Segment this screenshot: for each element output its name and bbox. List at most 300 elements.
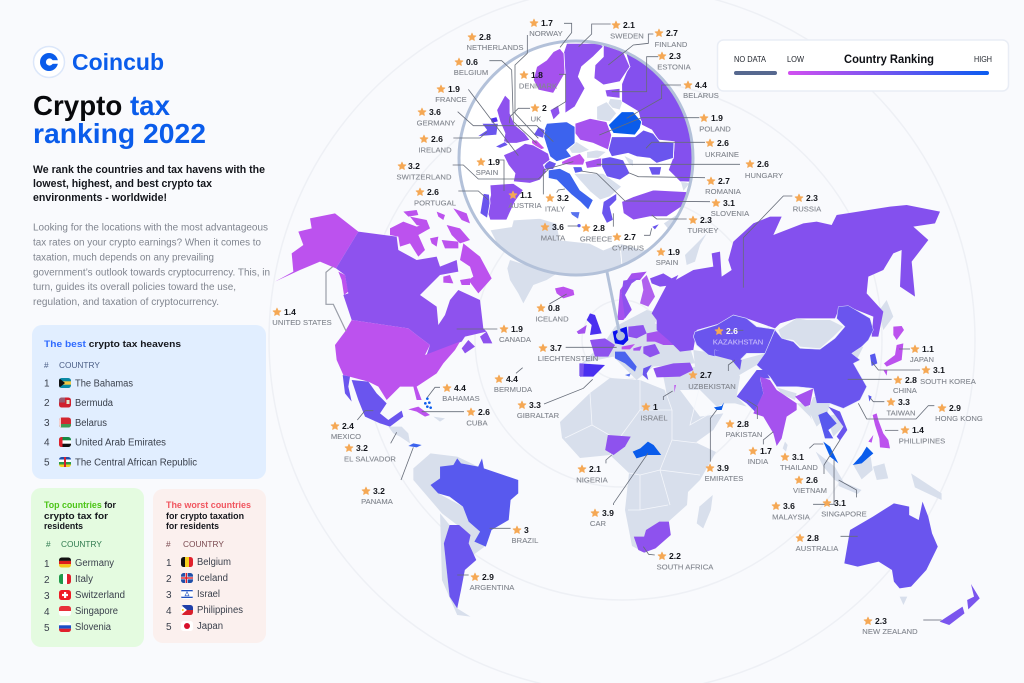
country: Panama: [408, 443, 422, 447]
country: United States: [335, 320, 460, 400]
label: Belgium: [454, 57, 537, 143]
row: Germany: 1: [44, 559, 50, 570]
label: Greece: GREECE: [580, 234, 612, 244]
row: Belarus: [44, 418, 107, 428]
country: South Africa: [634, 522, 671, 553]
country: Canada arctic islands: [390, 208, 492, 293]
flag: Japan: [181, 621, 193, 631]
row: The Bahamas: 1: [44, 378, 50, 390]
logo: Coincub: [34, 46, 164, 78]
label: Gibraltar: GIBRALTAR: [517, 411, 560, 420]
label: Germany: GERMANY: [417, 118, 455, 128]
label: Japan: [899, 344, 934, 364]
subtitle: We rank the countries and tax havens with the: [33, 164, 265, 176]
label: United States: [272, 267, 346, 331]
label: Romania: 2.7: [718, 176, 730, 186]
label: Bahamas: [427, 383, 480, 403]
row: Israel: 3: [166, 590, 172, 601]
label: Emirates: 3.9: [717, 463, 729, 473]
legend: country ranking: [718, 40, 1008, 91]
table header: COUNTRY: [61, 539, 102, 549]
row: Switzerland: 3: [44, 591, 50, 602]
label: Kazakhstan: [713, 326, 763, 346]
label: South Africa: [643, 547, 714, 572]
label: Israel: 1: [653, 402, 658, 412]
label: Estonia: [612, 51, 692, 92]
country: India: [753, 377, 797, 446]
label: India: 1.7: [760, 446, 772, 456]
logo: Coincub: Coincub: [72, 49, 164, 75]
label: Bahamas: 4.4: [454, 383, 466, 393]
label: India: INDIA: [748, 457, 769, 466]
magnifier handle: [607, 272, 625, 340]
country: Newfoundland: [480, 332, 492, 343]
country: Taiwan: [868, 395, 872, 402]
intro paragraph: [33, 222, 270, 308]
country: Malaysia peninsula: [823, 442, 838, 463]
label: Spain (second): [656, 247, 680, 267]
flag: Bermuda: [59, 398, 71, 408]
label: Estonia: ESTONIA: [657, 62, 692, 72]
label: Norway: [529, 18, 572, 47]
label: Panama: PANAMA: [361, 497, 394, 506]
country: China: [757, 306, 873, 408]
label: Taiwan: TAIWAN: [887, 408, 915, 418]
title: Crypto tax: [33, 90, 170, 121]
intro paragraph: regulation, and taxation of cryptocurrency.: [33, 297, 219, 308]
flag: Switzerland: [59, 590, 71, 600]
label: Australia: [796, 533, 858, 553]
row: The Bahamas: The Bahamas: [75, 378, 133, 390]
label: Denmark: [519, 70, 566, 109]
label: Kazakhstan: KAZAKHSTAN: [713, 338, 763, 346]
flag: Slovenia: [59, 622, 71, 632]
label: Poland: [599, 113, 731, 135]
label: Hungary: [597, 159, 783, 180]
label: Uzbekistan: UZBEKISTAN: [688, 382, 736, 391]
Europe countries: [478, 44, 692, 230]
label: Malaysia: MALAYSIA: [772, 512, 811, 522]
heading: top countries: Top countries for: [44, 500, 116, 511]
flag: UAE: [59, 437, 71, 447]
country: Pakistan: [737, 370, 770, 412]
label: Switzerland: [397, 161, 548, 182]
row: Belarus: 3: [44, 418, 50, 429]
label: Brazil: BRAZIL: [512, 536, 538, 545]
label: Singapore: SINGAPORE: [821, 510, 867, 518]
country: Mexico: [352, 380, 403, 427]
label: Bahamas: BAHAMAS: [442, 394, 480, 403]
flag: Belgium: [181, 557, 193, 567]
row: Philippines: 4: [166, 606, 172, 617]
flag: Philippines: [181, 605, 193, 615]
label: Emirates: EMIRATES: [705, 474, 743, 483]
label: UK: [509, 103, 547, 124]
label: Japan: JAPAN: [910, 355, 934, 364]
label: Greece: [580, 213, 613, 244]
label: Norway: 1.7: [541, 18, 553, 28]
table header: #: [166, 539, 171, 549]
label: CAR: CAR: [590, 519, 607, 528]
label: Malta: 3.6: [552, 222, 564, 232]
legend: country ranking: Country Ranking: [844, 52, 934, 66]
country: Argentina: [444, 525, 476, 608]
row: Singapore: Singapore: [75, 606, 118, 617]
label: Austria: AUSTRIA: [508, 201, 543, 210]
label: Portugal: 2.6: [427, 187, 439, 197]
label: Romania: [628, 173, 742, 196]
label: China: 2.8: [905, 375, 917, 385]
subtitle: environments - worldwide!: [33, 192, 167, 204]
label: Norway: NORWAY: [529, 29, 563, 38]
label: Belgium: 0.6: [466, 57, 478, 67]
label: Nigeria: [576, 455, 612, 484]
row: Slovenia: [44, 622, 111, 632]
heading: top countries: residents: [44, 521, 83, 532]
row: Bermuda: Bermuda: [75, 398, 113, 409]
heading: worst countries: [166, 500, 251, 532]
label: Hungary: HUNGARY: [745, 171, 783, 180]
label: Israel: [640, 391, 673, 422]
label: Brazil: 3: [524, 525, 529, 535]
label: Russia: [743, 193, 822, 288]
label: Denmark: DENMARK: [519, 82, 557, 90]
label: Uzbekistan: 2.7: [700, 370, 712, 380]
label: Spain: 1.9: [488, 157, 500, 167]
label: Cuba: CUBA: [466, 418, 489, 428]
label: El Salvador: 3.2: [356, 443, 368, 453]
label: Belarus: [627, 80, 719, 118]
label: Spain (second): SPAIN: [656, 258, 678, 267]
row: Germany: Germany: [75, 558, 114, 569]
panel: top countries for residents: [31, 488, 144, 647]
subtitle: [33, 164, 265, 204]
country: Mongolia: [778, 318, 843, 348]
country: Central African Republic: [633, 442, 661, 458]
label: Panama: [361, 447, 413, 506]
label: Germany: 3.6: [429, 107, 441, 117]
table header: #: [44, 360, 49, 370]
country: Iceland: [555, 287, 574, 298]
table header: COUNTRY: [183, 539, 224, 549]
label: Russia: RUSSIA: [793, 204, 822, 214]
label: Poland: POLAND: [699, 124, 731, 134]
label: Italy: [545, 189, 569, 214]
row: Singapore: [44, 606, 118, 616]
label: Phillipines: 1.4: [912, 425, 924, 435]
row: Philippines: [166, 605, 243, 615]
label: Hong Kong: [858, 403, 983, 423]
label: Nigeria: NIGERIA: [576, 476, 609, 484]
country: Bahamas: [424, 397, 432, 409]
label: Uzbekistan: [688, 360, 736, 391]
label: Canada: 1.9: [511, 324, 523, 334]
row: Singapore: 4: [44, 607, 50, 618]
row: Israel: Israel: [197, 589, 220, 600]
label: Canada: CANADA: [499, 335, 532, 344]
label: Thailand: THAILAND: [780, 463, 818, 472]
grey land: [388, 233, 942, 617]
row: Belgium: 1: [166, 558, 172, 569]
label: Pakistan: PAKISTAN: [726, 430, 762, 439]
country: Nigeria: [605, 435, 631, 455]
subtitle: lowest, highest, and best crypto tax: [33, 178, 213, 190]
country: Philippines: [868, 413, 890, 448]
label: Spain (second): 1.9: [668, 247, 680, 257]
intro paragraph: government’s outlook towards cryptocurrency. This, in: [33, 268, 270, 278]
label: Iceland: ICELAND: [535, 314, 569, 324]
label: Greece: 2.8: [593, 223, 605, 233]
label: UK: 2: [542, 103, 547, 113]
label: Ukraine: 2.6: [717, 138, 729, 148]
small Europe: [577, 272, 693, 393]
label: Portugal: PORTUGAL: [414, 198, 456, 208]
label: Estonia: 2.3: [669, 51, 681, 61]
label: Cyprus: [612, 228, 652, 252]
label: Kazakhstan: 2.6: [726, 326, 738, 336]
label: Poland: 1.9: [711, 113, 723, 123]
country: Kazakhstan: [693, 315, 775, 360]
label: Gibraltar: 3.3: [529, 400, 541, 410]
label: Pakistan: 2.8: [737, 419, 749, 429]
label: Ireland: [418, 132, 487, 154]
flag: Belarus: [59, 418, 71, 428]
label: Mexico: [331, 411, 373, 441]
row: Germany: [44, 558, 114, 568]
label: Finland: 2.7: [666, 28, 678, 38]
label: Sweden: [579, 20, 644, 47]
row: United Arab Emirates: 4: [44, 438, 50, 448]
row: Belgium: [166, 557, 230, 567]
label: Panama: 3.2: [373, 486, 385, 496]
table header: COUNTRY: [59, 360, 100, 370]
label: Liechtenstein: 3.7: [550, 343, 562, 353]
label: Switzerland: 3.2: [408, 161, 420, 171]
label: South Africa: 2.2: [669, 551, 681, 561]
row: Iceland: 2: [166, 574, 172, 585]
label: Argentina: [457, 572, 515, 592]
intro paragraph: Looking for the locations with the most advantageous: [33, 222, 268, 234]
label: France: FRANCE: [435, 95, 467, 104]
label: Hong Kong: 2.9: [949, 403, 961, 413]
flag: Israel: [181, 589, 193, 599]
legend: country ranking: HIGH: [974, 54, 992, 64]
country: Russia: [652, 205, 940, 352]
label: Malaysia: [772, 460, 834, 522]
label: Canada: [457, 324, 532, 344]
country: Thailand: [818, 412, 837, 438]
row: Slovenia: 5: [44, 623, 50, 634]
label: Italy: ITALY: [545, 204, 565, 214]
label: Ireland: 2.6: [431, 134, 443, 144]
row: Bermuda: [44, 398, 113, 408]
label: South Korea: 3.1: [933, 365, 945, 375]
country: Alaska panhandle: [338, 272, 348, 295]
legend: country ranking: NO DATA: [734, 54, 766, 64]
heading: best heavens: The best crypto tax heavens: [44, 339, 181, 350]
label: Finland: [608, 28, 688, 65]
flag: Italy: [59, 574, 71, 584]
row: Belarus: Belarus: [75, 418, 107, 429]
country: Uzbekistan: [715, 350, 742, 370]
label: Turkey: [652, 215, 719, 235]
label: Portugal: [414, 187, 488, 208]
label: Pakistan: [726, 400, 762, 439]
country: Nova Scotia: [462, 340, 475, 353]
label: South Africa: SOUTH AFRICA: [657, 562, 714, 572]
flag: Bahamas: [59, 378, 71, 388]
label: China: CHINA: [893, 386, 918, 395]
label: Switzerland: SWITZERLAND: [397, 172, 452, 182]
flag: Singapore: [59, 606, 71, 616]
label: France: 1.9: [448, 84, 460, 94]
label: Singapore: 3.1: [834, 498, 846, 508]
label: Netherlands: 2.8: [479, 32, 491, 42]
label: Liechtenstein: [538, 343, 617, 363]
magnifier: Europe close-up: [458, 40, 694, 276]
label: Turkey: TURKEY: [687, 226, 719, 235]
row: Italy: Italy: [75, 574, 93, 585]
row: Japan: Japan: [197, 621, 223, 632]
label: Austria: 1.1: [520, 190, 532, 200]
country: Emirates: [714, 402, 724, 410]
country: Vietnam: [828, 407, 847, 441]
label: Slovenia: [581, 171, 750, 218]
label: Belarus: BELARUS: [683, 91, 719, 100]
label: Emirates: [705, 410, 743, 483]
heading: worst countries: for residents: [166, 521, 219, 532]
label: Sweden: 2.1: [623, 20, 635, 30]
label: Slovenia: SLOVENIA: [711, 209, 750, 218]
label: Malta: MALTA: [541, 234, 566, 242]
country: Baja California: [343, 375, 352, 402]
title: ranking 2022: [33, 118, 206, 149]
world map: [275, 205, 980, 625]
label: El Salvador: EL SALVADOR: [344, 454, 396, 464]
label: Vietnam: 2.6: [806, 475, 818, 485]
row: Philippines: Philippines: [197, 605, 243, 616]
label: Thailand: [780, 444, 823, 472]
label: Gibraltar: [517, 379, 593, 420]
label: Ukraine: [646, 138, 739, 159]
flag: Iceland: [181, 573, 193, 583]
row: Iceland: [166, 573, 228, 583]
heading: top countries: crypto tax for: [44, 511, 108, 522]
row: Israel: [166, 589, 220, 599]
label: Spain: SPAIN: [476, 168, 498, 177]
label: Italy: 3.2: [557, 193, 569, 203]
country: Kola region: [650, 273, 678, 287]
label: Nigeria: 2.1: [589, 464, 601, 474]
heading: worst countries: for crypto taxation: [166, 511, 244, 522]
label: India: [748, 432, 773, 466]
label: CAR: 3.9: [602, 508, 614, 518]
label: South Korea: [872, 362, 977, 386]
label: United States: UNITED STATES: [272, 318, 332, 327]
label: China: [848, 375, 918, 395]
row: Italy: 2: [44, 575, 50, 586]
label: Phillipines: PHILLIPINES: [899, 436, 945, 446]
label: Liechtenstein: LIECHTENSTEIN: [538, 354, 598, 363]
label: Argentina: 2.9: [482, 572, 494, 582]
label: Denmark: 1.8: [531, 70, 543, 80]
country: North-east India: [795, 388, 813, 407]
label: New Zealand: NEW ZEALAND: [862, 627, 918, 636]
label: Brazil: [490, 525, 538, 545]
intro paragraph: taxation, much depends on any prevailing: [33, 252, 214, 264]
panel: best crypto tax heavens: [32, 325, 266, 479]
row: Slovenia: Slovenia: [75, 622, 111, 633]
label: Belarus: 4.4: [695, 80, 707, 90]
label: Hungary: 2.6: [757, 159, 769, 169]
row: United Arab Emirates: [44, 437, 166, 447]
row: Switzerland: [44, 590, 124, 600]
label: Israel: ISRAEL: [640, 414, 668, 422]
flag: CAR: [59, 457, 71, 467]
label: Austria: [508, 162, 573, 210]
label: Spain: [476, 157, 504, 191]
label: Ireland: IRELAND: [418, 146, 452, 154]
label: Taiwan: 3.3: [898, 397, 910, 407]
row: Iceland: Iceland: [197, 573, 228, 584]
row: Bermuda: 2: [44, 398, 50, 409]
label: Bermuda: [494, 368, 533, 394]
legend: country ranking: LOW: [787, 54, 804, 64]
label: Mexico: MEXICO: [331, 432, 361, 441]
label: Malta: [541, 222, 578, 242]
label: Mexico: 2.4: [342, 421, 354, 431]
row: Belgium: Belgium: [197, 557, 231, 568]
title: [33, 90, 206, 149]
flag: Germany: [59, 558, 71, 568]
table header: #: [46, 539, 51, 549]
country: South Korea: [870, 353, 877, 366]
intro paragraph: turn, guides its overall policies toward the use,: [33, 282, 236, 293]
label: Japan: 1.1: [922, 344, 934, 354]
label: Turkey: 2.3: [700, 215, 712, 225]
country: New Zealand: [940, 584, 980, 625]
label: South Korea: SOUTH KOREA: [920, 377, 977, 386]
label: Ukraine: UKRAINE: [705, 150, 739, 159]
label: Cyprus: 2.7: [624, 232, 636, 242]
label: Argentina: ARGENTINA: [470, 583, 515, 592]
label: Sweden: SWEDEN: [610, 32, 644, 40]
label: Cuba: [422, 407, 490, 428]
country: Brazil: [431, 458, 518, 547]
label: Iceland: [535, 294, 569, 324]
label: Malaysia: 3.6: [783, 501, 795, 511]
label: Vietnam: VIETNAM: [793, 486, 827, 495]
grey land in close-up: [490, 98, 690, 280]
row: Central African Republic: 5: [44, 458, 50, 468]
row: The Bahamas: [44, 378, 133, 388]
intro paragraph: tax rates on your crypto earnings? When it comes to: [33, 238, 261, 248]
label: Phillipines: [885, 425, 945, 446]
row: United Arab Emirates: United Arab Emirates: [75, 438, 166, 448]
label: Netherlands: [466, 32, 538, 138]
country: Canada: [336, 232, 487, 355]
label: Russia: 2.3: [806, 193, 818, 203]
label: Bermuda: 4.4: [506, 374, 518, 384]
row: Japan: 5: [166, 622, 172, 633]
country: Australia: [844, 502, 938, 588]
country: Japan: [883, 326, 904, 376]
label: El Salvador: [344, 432, 397, 464]
label: Germany: [417, 107, 553, 142]
label: Singapore: [821, 480, 867, 518]
label: Finland: FINLAND: [655, 40, 688, 49]
label: New Zealand: 2.3: [875, 616, 887, 626]
